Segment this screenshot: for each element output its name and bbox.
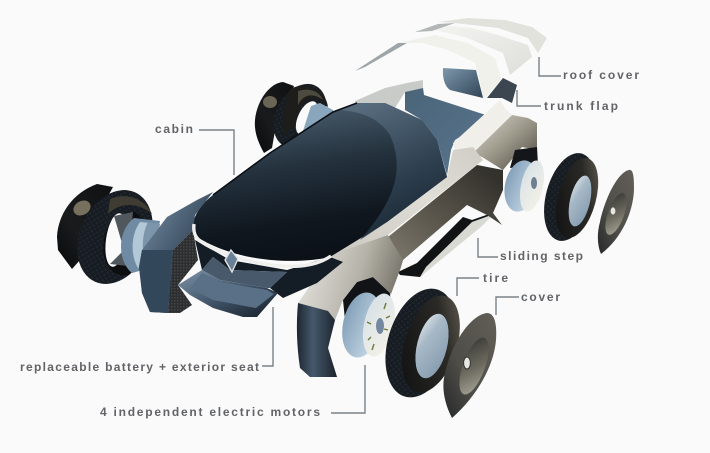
car body [139, 80, 538, 377]
front face [195, 240, 343, 298]
label: roof cover [539, 57, 639, 82]
upper step face [202, 257, 287, 288]
wheel: front right assembly [337, 280, 496, 418]
label: 4 independent electric motors: 4 independent electric motors [100, 405, 320, 419]
rear fender [473, 115, 537, 170]
rear wheel arch [510, 147, 538, 168]
label: cover: cover [521, 290, 560, 304]
motor: front right [337, 289, 400, 361]
front right fender [298, 235, 403, 377]
windshield frame silver [355, 80, 423, 108]
silver door band [330, 147, 483, 257]
tire [373, 280, 470, 406]
exterior seat / battery [178, 270, 278, 317]
wheel: rear right assembly [500, 147, 634, 254]
interior floor [405, 88, 492, 175]
logo [225, 250, 238, 272]
label: sliding step [478, 238, 583, 263]
label: cabin [155, 122, 234, 175]
wheel: front left assembly [57, 178, 167, 296]
side lower taupe panel [382, 165, 503, 290]
roof cover [355, 18, 547, 100]
label: trunk flap [517, 90, 618, 113]
trunk flap [487, 78, 517, 103]
cover [598, 170, 634, 254]
motor: front left [121, 218, 160, 273]
label: replaceable battery + exterior seat: replaceable battery + exterior seat [20, 360, 259, 374]
sliding step [398, 213, 494, 277]
cabin glass [193, 103, 447, 261]
label: tire: tire [483, 271, 508, 285]
tire [535, 147, 606, 247]
label: cover [496, 290, 560, 315]
label: 4 independent electric motors [100, 365, 365, 419]
motor: rear right [500, 157, 548, 215]
front left fender [139, 192, 213, 313]
label: trunk flap: trunk flap [544, 99, 618, 113]
cover [443, 313, 496, 418]
rear window glass [443, 68, 483, 98]
front grille [168, 230, 198, 313]
label: cabin: cabin [155, 122, 193, 136]
label: roof cover: roof cover [563, 68, 639, 82]
wheel: rear left assembly [255, 75, 337, 157]
label: sliding step: sliding step [500, 249, 583, 263]
white front band [194, 224, 331, 266]
label: replaceable battery + exterior seat [20, 307, 273, 374]
label: tire [457, 271, 508, 296]
front wheel arch [343, 277, 392, 320]
